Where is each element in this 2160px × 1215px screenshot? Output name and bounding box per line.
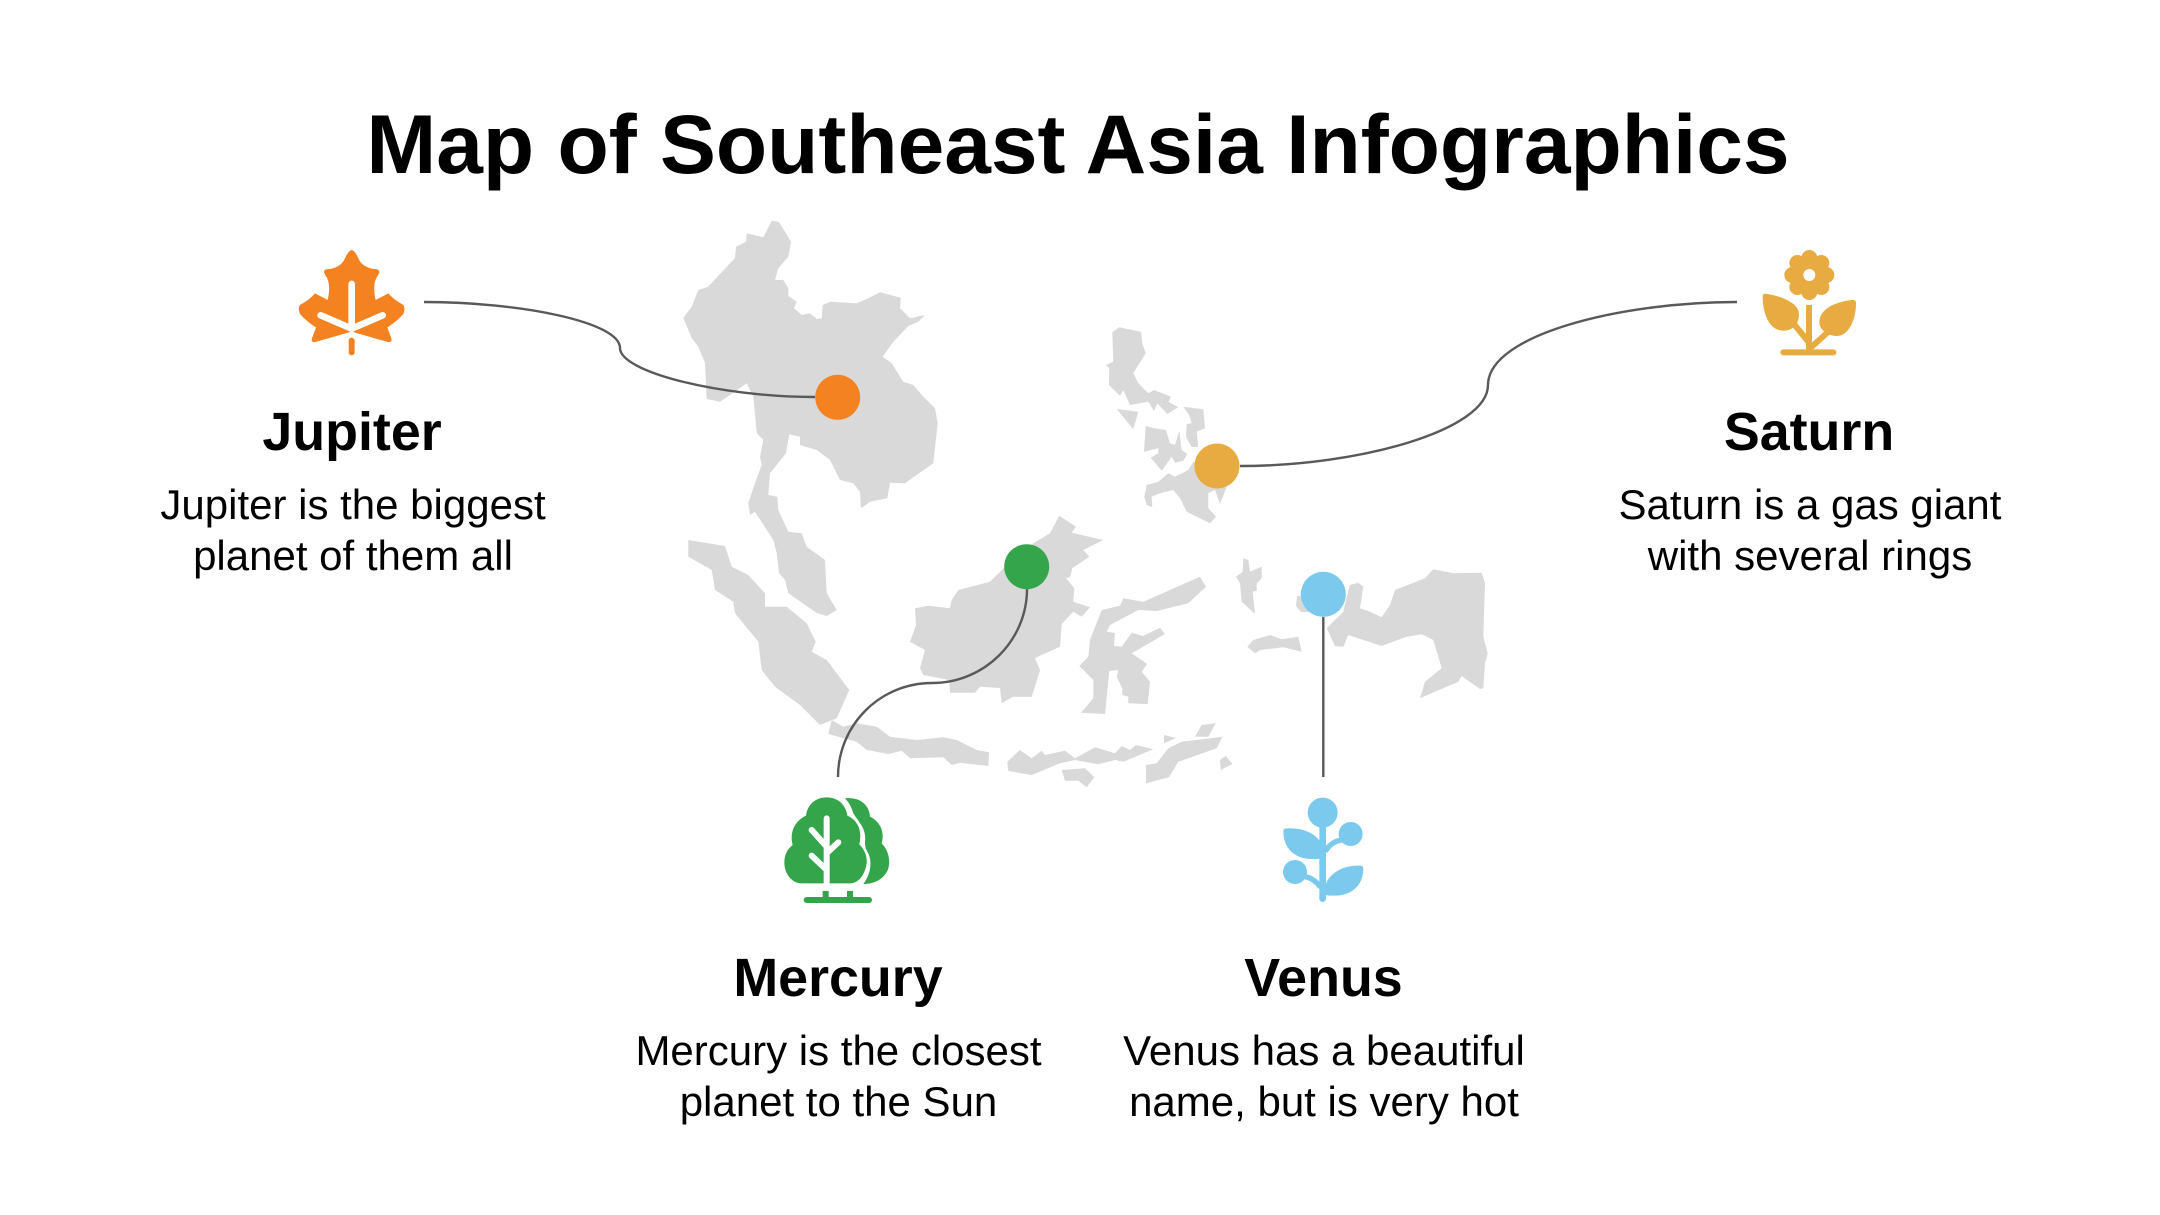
heading: Saturn: [1724, 402, 1894, 462]
description: with several rings: [1647, 532, 1972, 579]
description: Saturn is a gas giant: [1619, 481, 2002, 528]
map of Southeast Asia: [683, 221, 1488, 787]
map marker: Saturn: [1194, 444, 1240, 488]
icon: maple leaf: [299, 250, 404, 352]
Lesser Sunda islands: [1007, 723, 1232, 787]
icon: plant: [1283, 798, 1363, 899]
panel: Jupiter: [160, 250, 546, 579]
Halmahera: [1236, 558, 1262, 614]
connector: Saturn: [1240, 302, 1737, 466]
Seram: [1247, 635, 1302, 653]
panel: Venus: [1123, 798, 1525, 1125]
Sumatra: [688, 540, 849, 725]
icon: trees: [784, 797, 889, 900]
Sulawesi: [1079, 577, 1206, 714]
heading: Mercury: [733, 948, 943, 1008]
map marker: Mercury: [1004, 544, 1049, 589]
map marker: Jupiter: [815, 375, 860, 420]
panel: Saturn: [1619, 250, 2002, 579]
description: Venus has a beautiful: [1123, 1027, 1525, 1074]
map marker: Venus: [1301, 572, 1346, 617]
Borneo: [910, 516, 1103, 703]
heading: Venus: [1244, 948, 1403, 1008]
title: Map of Southeast Asia Infographics: [366, 97, 1790, 191]
Java: [828, 720, 989, 766]
heading: Jupiter: [262, 402, 442, 462]
Philippines: [1106, 327, 1227, 523]
description: Jupiter is the biggest: [160, 481, 546, 528]
connector: Mercury: [838, 589, 1027, 777]
icon: flower: [1763, 250, 1856, 352]
description: planet to the Sun: [680, 1078, 997, 1125]
description: name, but is very hot: [1129, 1078, 1519, 1125]
panel: Mercury: [635, 797, 1042, 1125]
description: planet of them all: [193, 532, 513, 579]
description: Mercury is the closest: [635, 1027, 1042, 1074]
New Guinea: [1296, 569, 1488, 698]
connector: Venus: [1322, 617, 1325, 777]
mainland and peninsula: [683, 221, 938, 616]
connector: Jupiter: [424, 302, 815, 397]
